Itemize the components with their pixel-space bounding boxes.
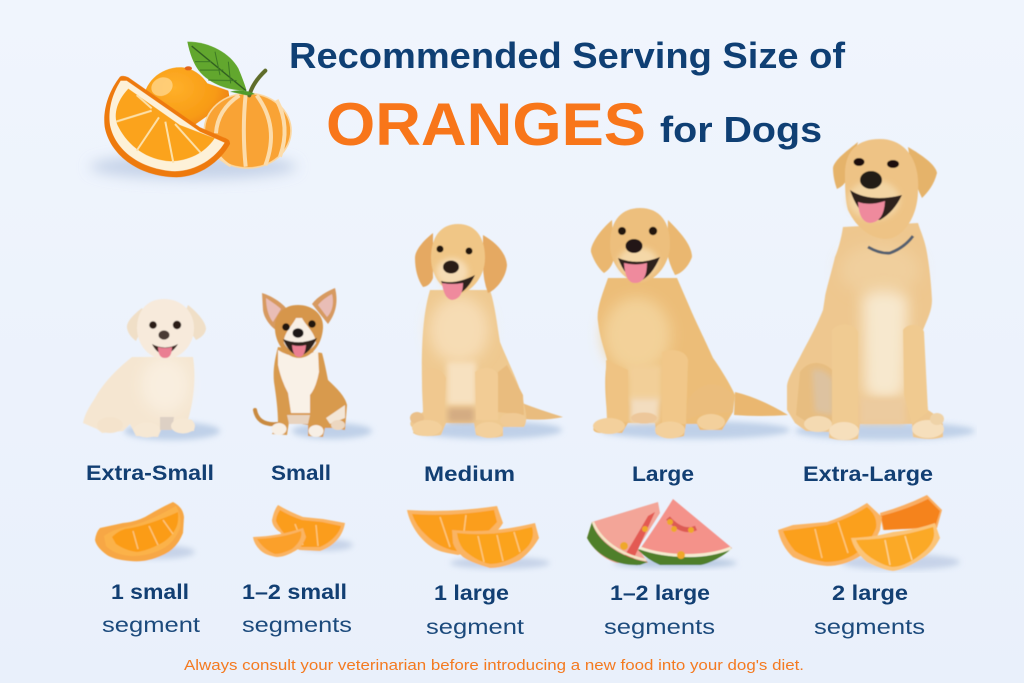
label: Small: Small [271, 462, 331, 485]
amount: 1–2 large segments [604, 582, 715, 639]
icon: whole orange [143, 66, 230, 135]
label: Extra-Large: Extra-Large [803, 463, 933, 486]
icon: orange group [90, 42, 297, 179]
icon: 1-2 large segments (melon-like wedges) [587, 499, 737, 568]
label: Large: Large [632, 463, 694, 486]
amount: 1 large segment: 1 large [434, 582, 509, 605]
amount: 1 small segment: segment [102, 614, 200, 637]
title: for Dogs [660, 109, 822, 150]
dog: medium golden [410, 224, 563, 439]
icon: leaf [187, 42, 255, 95]
dog: extra-large labrador [787, 139, 975, 440]
amount: 1–2 small segments [242, 581, 352, 637]
title [289, 35, 846, 158]
collar [868, 236, 913, 253]
amount: 2 large segments: 2 large [832, 582, 908, 605]
icon: 2 small orange segments [253, 505, 353, 557]
amount: 1–2 large segments: segments [604, 616, 715, 639]
label: Medium: Medium [424, 463, 515, 486]
label: Extra-Small: Extra-Small [86, 462, 214, 485]
amount: 1–2 large segments: 1–2 large [610, 582, 710, 605]
amount: 2 large segments: segments [814, 616, 925, 639]
amount: 2 large segments [814, 582, 925, 639]
icon: 1 small orange segment [95, 502, 195, 561]
icon: orange slice [104, 76, 230, 177]
icon: 2 large orange segments [778, 495, 960, 571]
amount: 1 small segment: 1 small [111, 581, 189, 604]
amount: 1–2 small segments: 1–2 small [242, 581, 347, 604]
dog: extra-small white puppy [83, 299, 220, 440]
amount: 1 large segment [426, 582, 524, 639]
amount: 1–2 small segments: segments [242, 614, 352, 637]
dog: small chihuahua [255, 288, 372, 439]
icon: peeled orange [204, 93, 291, 168]
icon: 1 large orange segment [407, 506, 550, 569]
dog: large golden [591, 208, 790, 439]
title: Recommended Serving Size of [289, 35, 846, 76]
amount: 1 large segment: segment [426, 616, 524, 639]
footer note: Always consult your veterinarian before introducing a new food into your dog's diet. [184, 657, 804, 674]
icon: stem [249, 71, 265, 95]
title: ORANGES [326, 91, 646, 158]
amount: 1 small segment [102, 581, 200, 637]
